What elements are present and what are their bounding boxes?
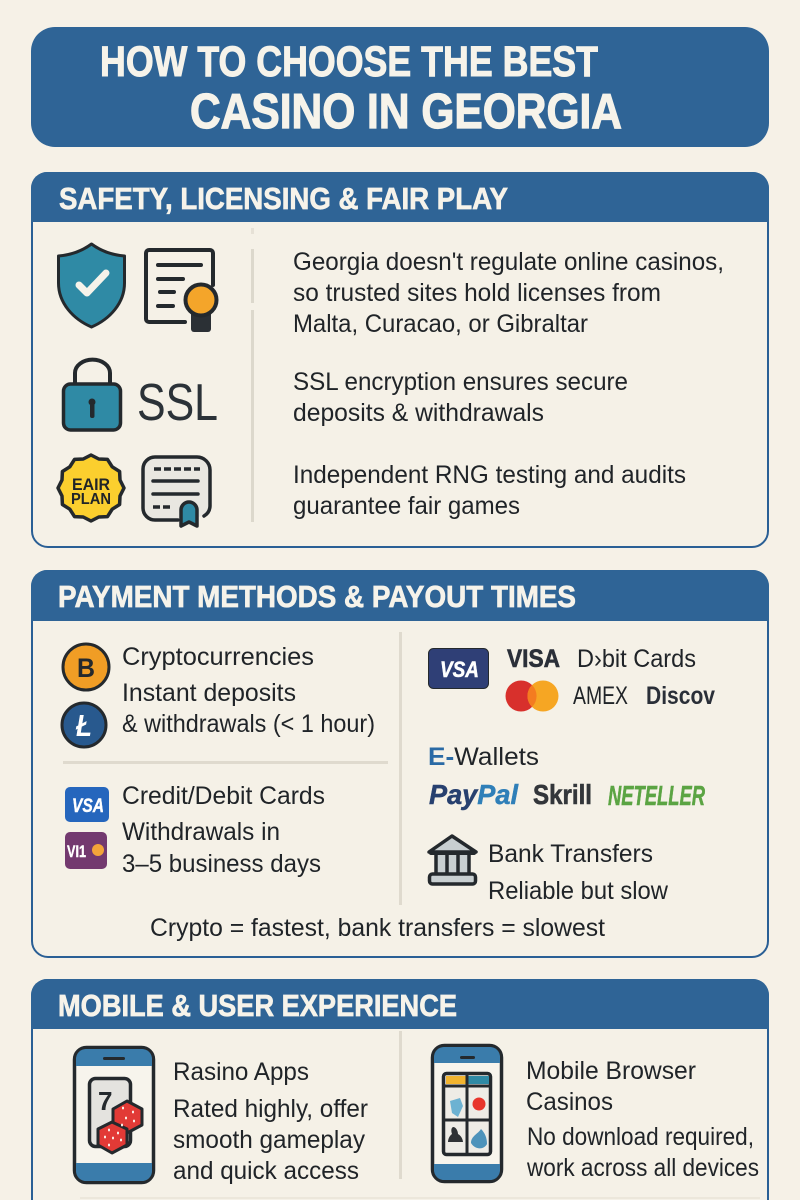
text: cryptocurrencies: Instant deposits xyxy=(122,679,296,707)
text: credit and debit cards xyxy=(122,782,325,878)
text: cryptocurrencies: & withdrawals (< 1 hour) xyxy=(122,710,375,738)
icon: audit certificate xyxy=(143,457,210,526)
title banner xyxy=(31,27,769,147)
heading: safety: SAFETY, LICENSING & FAIR PLAY xyxy=(59,181,508,216)
card brands: D›bit Cards xyxy=(577,645,696,673)
text: credit and debit cards: Withdrawals in xyxy=(122,818,280,846)
icon: phone with browser game grid xyxy=(432,1046,502,1182)
text: licensing: Georgia doesn't regulate online casinos, xyxy=(293,248,724,276)
text: RNG testing xyxy=(293,461,686,520)
text: licensing xyxy=(293,248,724,338)
text: licensing: Malta, Curacao, or Gibraltar xyxy=(293,310,588,338)
text: mobile browser casinos: Mobile Browser xyxy=(526,1057,696,1085)
icon: bank xyxy=(429,836,476,884)
icon: mastercard xyxy=(506,680,558,712)
card brands: AMEX xyxy=(573,682,628,710)
text: credit and debit cards: 3–5 business days xyxy=(122,850,321,878)
text: mobile browser casinos xyxy=(526,1057,759,1182)
heading: mobile xyxy=(31,979,769,1029)
SSL label: SSL xyxy=(137,374,218,432)
text: casino apps: smooth gameplay xyxy=(173,1126,365,1154)
icon: license document with seal xyxy=(146,250,216,332)
icon: padlock xyxy=(64,360,120,430)
text: casino apps xyxy=(173,1058,368,1185)
icon: purple card xyxy=(65,832,107,869)
e-wallet brands: NETELLER xyxy=(608,780,706,811)
card brands: Discov xyxy=(646,682,715,710)
title banner: CASINO IN GEORGIA xyxy=(190,85,622,139)
panel: mobile and user experience xyxy=(31,979,769,1200)
e-wallets heading: E-Wallets xyxy=(428,743,539,771)
text: RNG testing: guarantee fair games xyxy=(293,492,520,520)
heading: safety xyxy=(31,172,769,222)
icon: fair play badge: PLAN xyxy=(71,491,111,508)
icon: litecoin xyxy=(62,703,106,747)
text: SSL encryption: SSL encryption ensures secure xyxy=(293,368,628,396)
panel: safety, licensing and fair play xyxy=(31,172,769,547)
text: cryptocurrencies xyxy=(122,643,375,738)
text: casino apps: and quick access xyxy=(173,1157,359,1185)
heading: mobile: MOBILE & USER EXPERIENCE xyxy=(58,988,457,1023)
icon: navy visa card xyxy=(428,648,488,688)
icon: visa card xyxy=(65,787,109,822)
icon: visa card: VSA xyxy=(72,796,104,817)
heading: payment: PAYMENT METHODS & PAYOUT TIMES xyxy=(58,579,576,614)
icon: phone with card and dice: 7 xyxy=(98,1086,112,1116)
text: mobile browser casinos: No download required, xyxy=(527,1123,754,1151)
text: bank transfers: Bank Transfers xyxy=(488,840,653,868)
e-wallet brands: PayPal xyxy=(429,779,519,810)
text: cryptocurrencies: Cryptocurrencies xyxy=(122,643,314,671)
e-wallet brands xyxy=(429,779,706,811)
text: SSL encryption xyxy=(293,368,628,427)
card brands: VISA xyxy=(507,645,560,673)
text: bank transfers: Reliable but slow xyxy=(488,877,669,905)
text: RNG testing: Independent RNG testing and audits xyxy=(293,461,686,489)
icon: purple card: VI1 xyxy=(67,842,86,861)
icon: bitcoin xyxy=(63,644,109,690)
card brands xyxy=(507,645,715,710)
panel: payment methods and payout times xyxy=(31,570,769,957)
text: bank transfers xyxy=(488,840,669,905)
text: casino apps: Rasino Apps xyxy=(173,1058,309,1086)
icon: shield with check xyxy=(58,244,124,327)
text: mobile browser casinos: work across all devices xyxy=(526,1154,759,1182)
callout: payout summary: Crypto = fastest, bank transfers = slowest xyxy=(150,914,605,942)
icon: fair play badge: EAIR xyxy=(72,475,110,494)
text: mobile browser casinos: Casinos xyxy=(526,1088,613,1116)
icon: litecoin: Ł xyxy=(75,708,92,743)
e-wallet brands: Skrill xyxy=(533,779,592,810)
text: SSL encryption: deposits & withdrawals xyxy=(293,399,544,427)
heading: payment xyxy=(31,570,769,621)
icon: fair play badge xyxy=(58,455,124,521)
text: casino apps: Rated highly, offer xyxy=(173,1095,368,1123)
text: licensing: so trusted sites hold licenses from xyxy=(293,279,661,307)
icon: phone with card and dice xyxy=(74,1048,154,1182)
icon: bitcoin: B xyxy=(77,653,95,683)
title banner: HOW TO CHOOSE THE BEST xyxy=(100,38,598,86)
text: credit and debit cards: Credit/Debit Cards xyxy=(122,782,325,810)
icon: navy visa card: VSA xyxy=(440,657,479,682)
